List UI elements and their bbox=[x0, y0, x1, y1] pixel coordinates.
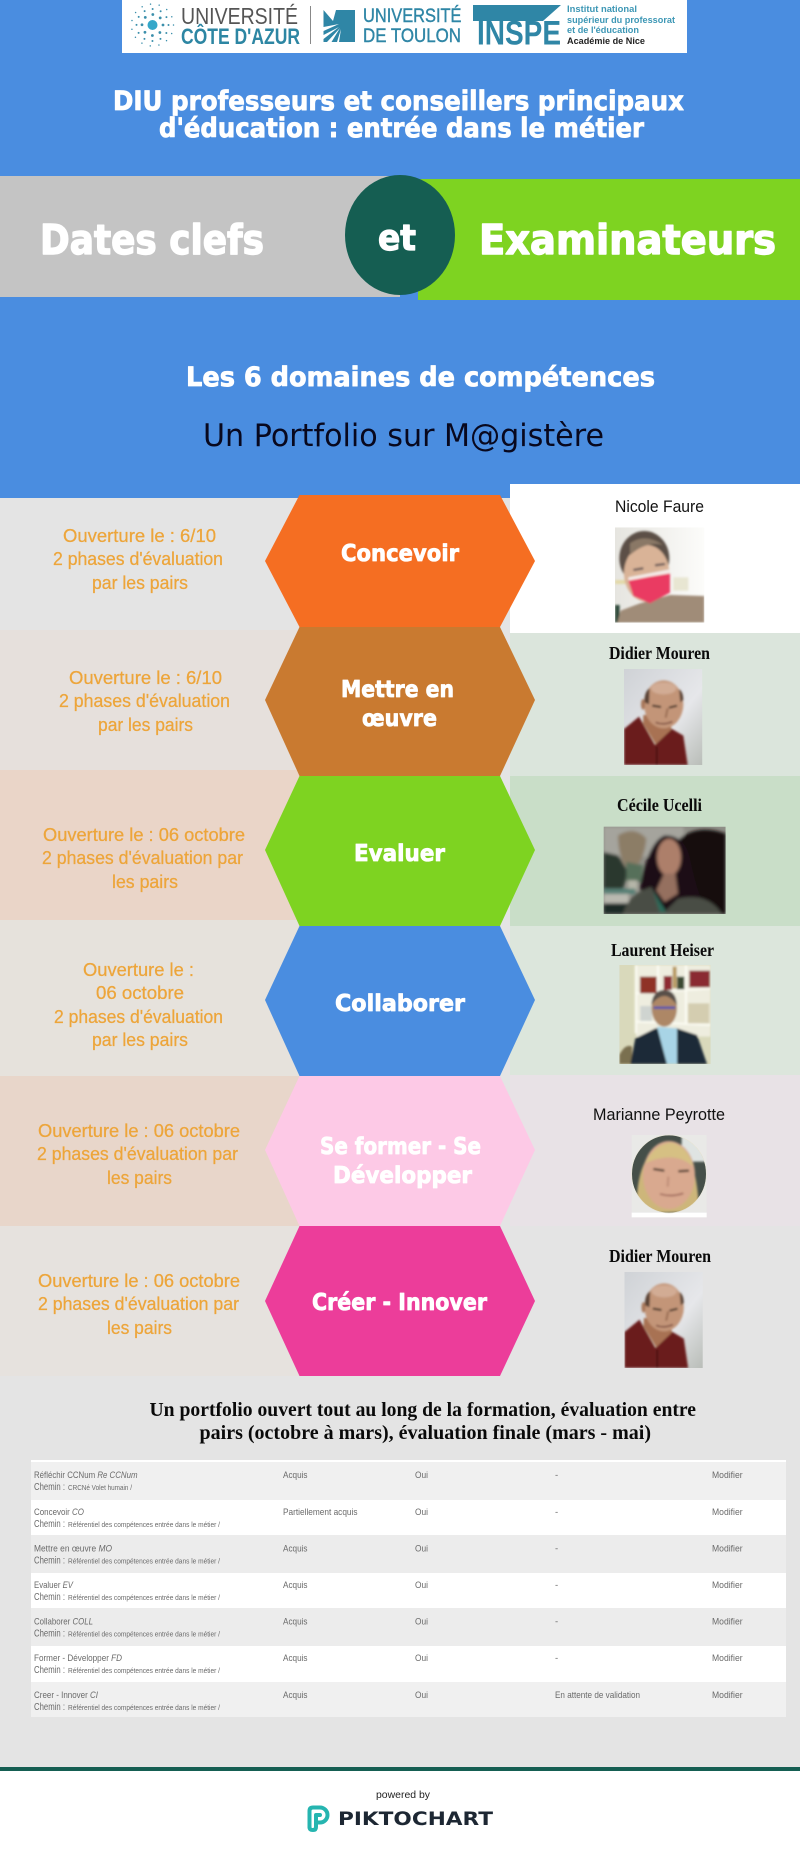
row: Mettre en œuvre: Mettre en œuvre MO bbox=[34, 1544, 113, 1554]
Université Côte d'Azur wordmark: CÔTE D'AZUR bbox=[181, 24, 300, 49]
row: Mettre en œuvre: Modifier bbox=[712, 1544, 743, 1554]
row: Creer - Innover: En attente de validation bbox=[555, 1690, 640, 1701]
dates: Ouverture le : 06 octobre bbox=[38, 1271, 240, 1291]
row: Former - Développer: Référentiel des compétences entrée dans le métier / bbox=[68, 1668, 220, 1675]
title bbox=[113, 86, 684, 144]
INSPE descriptor: supérieur du professorat bbox=[567, 15, 676, 26]
row: Former - Développer bbox=[31, 1646, 786, 1682]
row: Collaborer: Oui bbox=[415, 1616, 428, 1628]
dates: les pairs bbox=[107, 1318, 172, 1338]
text block: portfolio description: Un portfolio ouvert tout au long de la formation, évaluation entre bbox=[150, 1399, 696, 1421]
title: DIU professeurs et conseillers principaux bbox=[113, 86, 684, 117]
dates: les pairs bbox=[107, 1168, 172, 1188]
dates: les pairs bbox=[112, 872, 178, 892]
row: Former - Développer: - bbox=[555, 1653, 558, 1664]
dates: Ouverture le : bbox=[83, 960, 194, 980]
panel: Collaborer bbox=[54, 926, 714, 1076]
row: Evaluer: Chemin : bbox=[34, 1591, 65, 1603]
INSPE logo: INSPE bbox=[477, 14, 561, 52]
row: Collaborer bbox=[31, 1608, 786, 1646]
row: Former - Développer: Acquis bbox=[283, 1653, 308, 1664]
heading: Les 6 domaines de compétences: Les 6 domaines de compétences bbox=[186, 362, 655, 393]
hexagon label: œuvre bbox=[362, 706, 437, 732]
row: Réfléchir CCNum: - bbox=[555, 1470, 558, 1481]
hexagon label: Mettre en bbox=[341, 677, 454, 703]
examiner name: Nicole Faure bbox=[615, 497, 704, 516]
row: Mettre en œuvre: Acquis bbox=[283, 1544, 308, 1554]
row: Former - Développer: Former - Développer FD bbox=[34, 1653, 122, 1664]
dates: 2 phases d'évaluation par bbox=[37, 1144, 238, 1164]
row: Collaborer: - bbox=[555, 1616, 558, 1628]
row: Former - Développer: Oui bbox=[415, 1653, 428, 1664]
row: Concevoir: Oui bbox=[415, 1507, 428, 1518]
icon: Université de Toulon square bbox=[324, 10, 355, 42]
examiner name: Didier Mouren bbox=[609, 1246, 711, 1266]
banner: Dates clefs et Examinateurs bbox=[0, 175, 800, 300]
heading: et: et bbox=[378, 218, 416, 259]
row: Creer - Innover: Chemin : bbox=[34, 1701, 65, 1713]
row: Concevoir bbox=[31, 1500, 786, 1535]
row: Collaborer: Modifier bbox=[712, 1616, 743, 1628]
Université de Toulon wordmark: UNIVERSITÉ bbox=[363, 6, 462, 27]
hexagon bbox=[265, 1076, 535, 1226]
Université Côte d'Azur wordmark: UNIVERSITÉ bbox=[181, 3, 298, 29]
examiner name: Cécile Ucelli bbox=[617, 795, 702, 815]
logo banner bbox=[122, 0, 687, 53]
row: Réfléchir CCNum: Réfléchir CCNum Re CCNum bbox=[34, 1470, 138, 1481]
row: Evaluer: Modifier bbox=[712, 1580, 743, 1591]
INSPE descriptor bbox=[567, 4, 676, 47]
panel: Dates clefs bbox=[0, 176, 400, 297]
hexagon bbox=[265, 495, 535, 627]
row: Creer - Innover: Acquis bbox=[283, 1690, 308, 1701]
dates bbox=[37, 1121, 240, 1188]
INSPE logo bbox=[473, 5, 561, 52]
panel: Se former - Se Développer bbox=[37, 1076, 725, 1226]
hexagon bbox=[265, 627, 535, 776]
hexagon label: Créer - Innover bbox=[312, 1290, 488, 1316]
panel: Evaluer bbox=[42, 776, 726, 926]
row: Concevoir: Modifier bbox=[712, 1507, 743, 1518]
row: Former - Développer: Chemin : bbox=[34, 1664, 65, 1676]
row: Creer - Innover: Oui bbox=[415, 1690, 428, 1701]
right examiner panels bbox=[510, 484, 800, 1226]
INSPE descriptor: Académie de Nice bbox=[567, 36, 645, 47]
row: Evaluer: Oui bbox=[415, 1580, 428, 1591]
dates: Ouverture le : 06 octobre bbox=[38, 1121, 240, 1141]
heading: Examinateurs: Examinateurs bbox=[479, 216, 776, 264]
text block: portfolio description: pairs (octobre à mars), évaluation finale (mars - mai) bbox=[200, 1422, 651, 1444]
hexagon label: Se former - Se bbox=[320, 1134, 481, 1160]
dates: Ouverture le : 06 octobre bbox=[43, 825, 245, 845]
panel: Concevoir bbox=[53, 495, 704, 627]
dates bbox=[38, 1271, 240, 1338]
Université de Toulon wordmark: DE TOULON bbox=[363, 26, 461, 47]
INSPE descriptor: et de l'éducation bbox=[567, 25, 639, 36]
row: Réfléchir CCNum: Acquis bbox=[283, 1470, 308, 1481]
left date panels bbox=[0, 630, 305, 1376]
row: Réfléchir CCNum: Chemin : bbox=[34, 1481, 65, 1493]
Université de Toulon wordmark bbox=[363, 6, 462, 47]
row: Evaluer: - bbox=[555, 1580, 558, 1591]
row: Creer - Innover: Référentiel des compétences entrée dans le métier / bbox=[68, 1705, 220, 1712]
dates: par les pairs bbox=[92, 1030, 188, 1050]
circle: et bbox=[345, 175, 455, 295]
hexagon bbox=[265, 776, 535, 926]
row: Evaluer: Acquis bbox=[283, 1580, 308, 1591]
row: Evaluer: Evaluer EV bbox=[34, 1580, 74, 1591]
row: Collaborer: Collaborer COLL bbox=[34, 1616, 93, 1628]
dates: 2 phases d'évaluation par bbox=[38, 1294, 239, 1314]
text block: portfolio description bbox=[150, 1399, 696, 1444]
title: d'éducation : entrée dans le métier bbox=[159, 113, 644, 144]
dates bbox=[59, 668, 230, 735]
row: Concevoir: - bbox=[555, 1507, 558, 1518]
examiner name: Marianne Peyrotte bbox=[593, 1105, 725, 1124]
examiner name: Laurent Heiser bbox=[611, 940, 714, 960]
footer: powered by Piktochart bbox=[0, 1767, 800, 1851]
dates: 2 phases d'évaluation par bbox=[42, 848, 243, 868]
photo: Cécile Ucelli bbox=[604, 827, 726, 914]
hexagon label: Concevoir bbox=[341, 541, 460, 567]
dates: 2 phases d'évaluation bbox=[59, 691, 230, 711]
hexagon label: Collaborer bbox=[335, 991, 466, 1017]
photo: Nicole Faure bbox=[615, 527, 704, 623]
dates bbox=[53, 526, 223, 593]
photo: Laurent Heiser bbox=[619, 965, 711, 1064]
hexagon label: Evaluer bbox=[354, 841, 446, 867]
hexagon bbox=[265, 1226, 535, 1376]
row: Réfléchir CCNum bbox=[31, 1462, 786, 1500]
icon: Université Côte d'Azur burst bbox=[132, 4, 174, 46]
dates bbox=[54, 960, 223, 1050]
hexagon label bbox=[341, 677, 454, 732]
row: Collaborer: Chemin : bbox=[34, 1628, 65, 1640]
dates: 2 phases d'évaluation bbox=[54, 1007, 223, 1027]
icon: Piktochart logo bbox=[310, 1808, 328, 1830]
powered by: powered by bbox=[376, 1789, 431, 1801]
row: Réfléchir CCNum: CRCNé Volet humain / bbox=[68, 1485, 132, 1492]
photo: Didier Mouren bbox=[624, 669, 702, 765]
Université Côte d'Azur wordmark bbox=[181, 3, 300, 49]
photo: Marianne Peyrotte bbox=[632, 1135, 707, 1217]
row: Former - Développer: Modifier bbox=[712, 1653, 743, 1664]
row: Creer - Innover: Modifier bbox=[712, 1690, 743, 1701]
row: Mettre en œuvre bbox=[31, 1535, 786, 1573]
examiner name: Didier Mouren bbox=[609, 643, 710, 663]
hexagon label: Développer bbox=[333, 1163, 473, 1189]
dates: 2 phases d'évaluation bbox=[53, 549, 223, 569]
row: Concevoir: Concevoir CO bbox=[34, 1507, 85, 1518]
row: Mettre en œuvre: Chemin : bbox=[34, 1554, 65, 1566]
blue header background bbox=[0, 0, 800, 500]
dates: Ouverture le : 6/10 bbox=[69, 668, 222, 688]
dates: par les pairs bbox=[98, 715, 193, 735]
dates: 06 octobre bbox=[96, 983, 184, 1003]
row: Creer - Innover: Creer - Innover CI bbox=[34, 1690, 98, 1701]
row: Collaborer: Référentiel des compétences entrée dans le métier / bbox=[68, 1632, 220, 1638]
dates: par les pairs bbox=[92, 573, 188, 593]
subheading: Un Portfolio sur M@gistère: Un Portfolio sur M@gistère bbox=[203, 418, 604, 454]
panel: Examinateurs bbox=[418, 179, 800, 300]
panel: Mettre en œuvre bbox=[59, 627, 710, 776]
row: Mettre en œuvre: - bbox=[555, 1544, 558, 1554]
hexagon label bbox=[320, 1134, 481, 1189]
row: Mettre en œuvre: Oui bbox=[415, 1544, 428, 1554]
dates bbox=[42, 825, 245, 892]
hexagon bbox=[265, 926, 535, 1076]
INSPE descriptor: Institut national bbox=[567, 4, 637, 15]
row: Evaluer: Référentiel des compétences entrée dans le métier / bbox=[68, 1595, 220, 1602]
photo: Didier Mouren bbox=[624, 1272, 703, 1368]
row: Concevoir: Chemin : bbox=[34, 1518, 65, 1530]
row: Collaborer: Acquis bbox=[283, 1616, 308, 1628]
Piktochart wordmark: PIKTOCHART bbox=[338, 1808, 493, 1830]
row: Concevoir: Partiellement acquis bbox=[283, 1507, 358, 1518]
row: Evaluer bbox=[31, 1573, 786, 1608]
dates: Ouverture le : 6/10 bbox=[63, 526, 216, 546]
row: Creer - Innover bbox=[31, 1682, 786, 1717]
table: portfolio competences bbox=[31, 1460, 786, 1717]
row: Réfléchir CCNum: Oui bbox=[415, 1470, 428, 1481]
panel: Créer - Innover bbox=[38, 1226, 711, 1376]
grey base of the domain rows and the lower section bbox=[0, 498, 800, 1767]
heading: Dates clefs: Dates clefs bbox=[40, 216, 264, 264]
row: Concevoir: Référentiel des compétences entrée dans le métier / bbox=[68, 1522, 220, 1529]
row: Mettre en œuvre: Référentiel des compétences entrée dans le métier / bbox=[68, 1558, 220, 1566]
row: Réfléchir CCNum: Modifier bbox=[712, 1470, 743, 1481]
